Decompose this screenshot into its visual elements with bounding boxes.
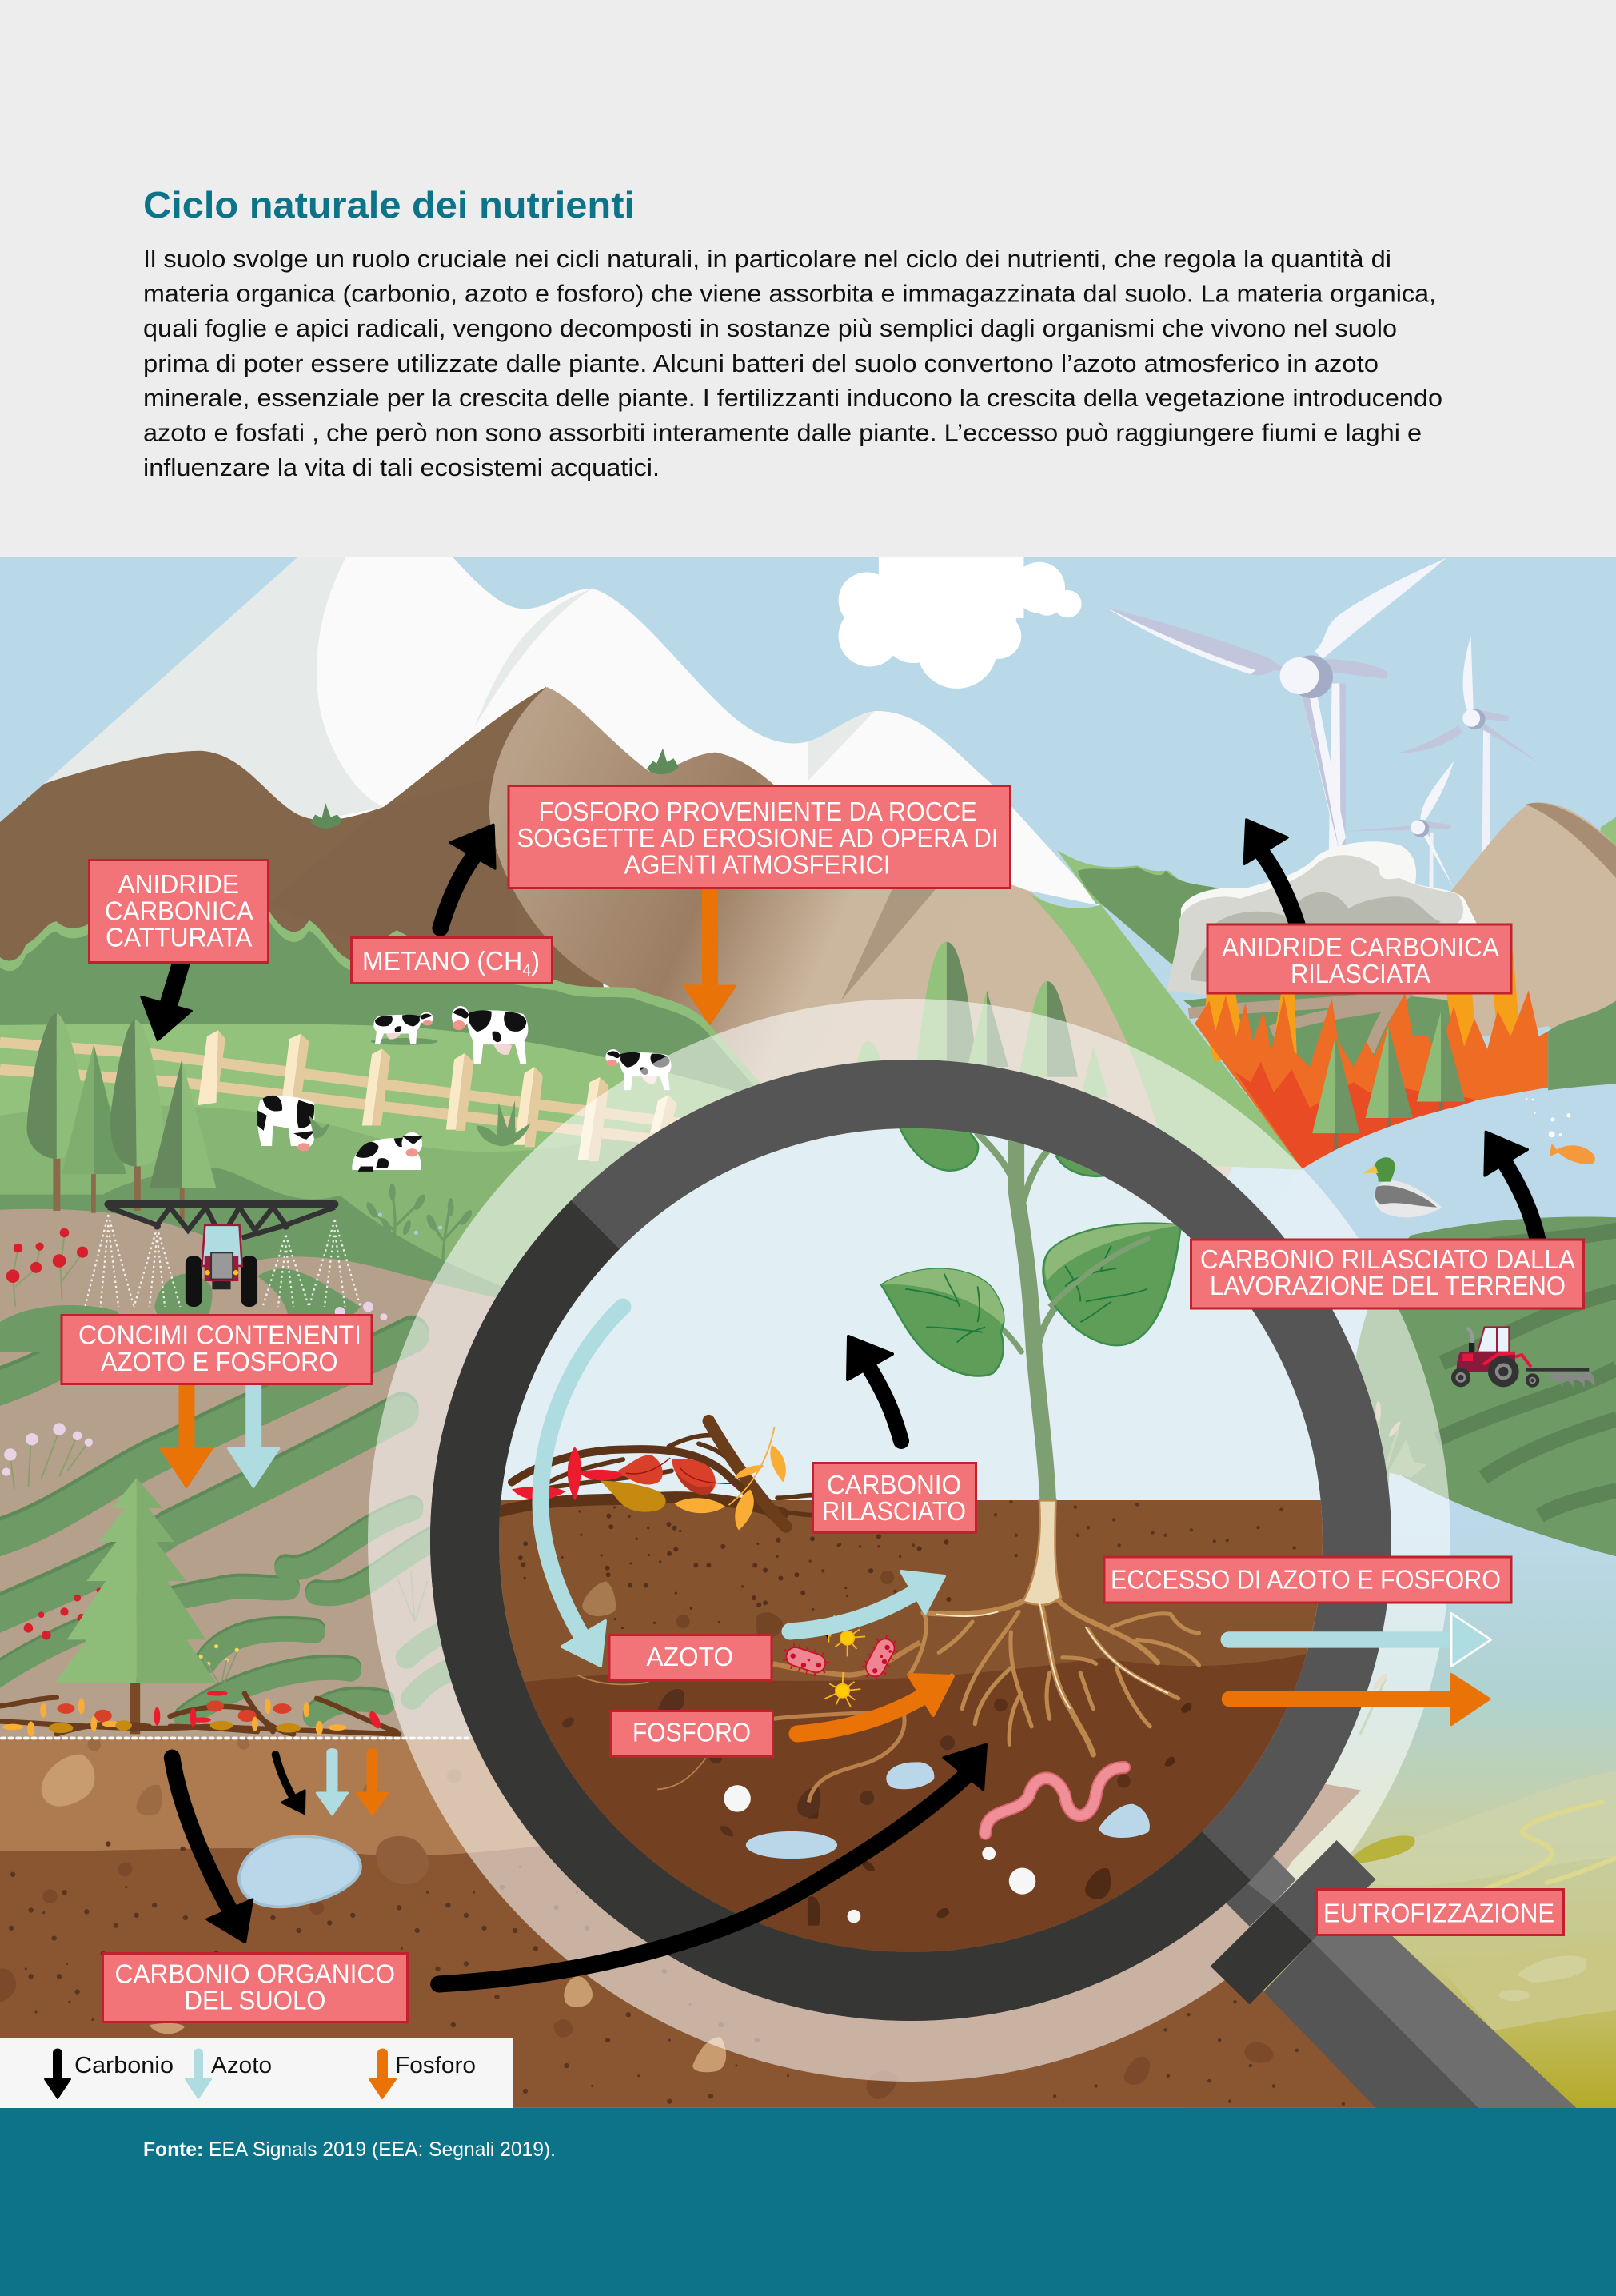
lens view: soil, plant, roots: [499, 1128, 1323, 1952]
duck: [1363, 1157, 1442, 1217]
cloud: [839, 552, 1082, 689]
magnifier collar: [1211, 1840, 1375, 2004]
long side roots: [577, 1643, 920, 1803]
soil specks upper right: [823, 1502, 1295, 1622]
label: excess nitrogen and phosphorus: [1104, 1557, 1511, 1603]
header band: [0, 0, 1616, 557]
magnifier ring: [465, 1094, 1357, 1987]
soil specks lower right: [1055, 2002, 1343, 2104]
label: carbon dioxide captured: [90, 861, 269, 963]
body text: minerale, essenziale per la crescita delle piante. I fertilizzanti inducono la crescita della vegetazione introducendo: [143, 384, 1442, 412]
label: phosphorus: [611, 1711, 772, 1756]
label: carbon released from litter: RILASCIATO: [822, 1497, 966, 1527]
right hill: [1323, 802, 1616, 1072]
body text: Il suolo svolge un ruolo cruciale nei cicli naturali, in particolare nel ciclo dei nutrienti, che regola la quantità di: [143, 245, 1391, 273]
label: nitrogen: AZOTO: [646, 1643, 733, 1672]
arrow: phosphorus from rock: [684, 888, 736, 1024]
label: soil organic carbon: [102, 1953, 408, 2022]
arrows: infiltration: [276, 1749, 388, 1815]
legend nitrogen: Azoto: [211, 2053, 272, 2078]
label: soil organic carbon: DEL SUOLO: [184, 1987, 326, 2015]
left leaf: [881, 1269, 1004, 1376]
fish: [1526, 1098, 1595, 1164]
fallen leaves: [512, 1427, 786, 1531]
cows: [257, 1006, 672, 1172]
title: Ciclo naturale dei nutrienti: [143, 184, 635, 226]
bacteria and microbes: [784, 1615, 897, 1707]
branches: [0, 1693, 399, 1734]
label: carbon released from litter: CARBONIO: [827, 1471, 961, 1500]
label: carbon dioxide released: ANIDRIDE CARBONICA: [1222, 933, 1500, 963]
label: phosphorus from rocks: [509, 785, 1011, 888]
arrow: carbon into soil: [172, 1758, 253, 1943]
label: carbon released from litter: [812, 1463, 976, 1532]
body text: influenzare la vita di tali ecosistemi acquatici.: [143, 453, 660, 481]
meadow: [0, 1024, 808, 1317]
yellow flowers: [199, 1644, 239, 1666]
label: carbon dioxide captured: CATTURATA: [106, 923, 253, 953]
shrub with blue berries: [365, 1184, 474, 1261]
legend phosphorus: Fosforo: [395, 2053, 476, 2078]
trees: [26, 1013, 217, 1221]
roots: [911, 1591, 1199, 1755]
red flowers: [24, 1587, 102, 1639]
source note: Fonte: EEA Signals 2019 (EEA: Segnali 2019).: [143, 2138, 556, 2161]
label: nitrogen: [609, 1635, 772, 1681]
big right leaf: [1043, 1224, 1181, 1345]
label: methane: METANO (CH: [362, 947, 530, 976]
label: methane: 4: [522, 961, 532, 980]
label: eutrophication: EUTROFIZZAZIONE: [1323, 1899, 1554, 1929]
arrows: excess nutrients: [1229, 1613, 1491, 1725]
label: carbon dioxide released: [1207, 924, 1511, 993]
label: methane: ): [531, 947, 540, 976]
right green strip: [1548, 1000, 1616, 1092]
label: carbon released by tillage: LAVORAZIONE DEL TERRENO: [1210, 1272, 1566, 1301]
translucent lens glass halo: [368, 999, 1450, 2082]
legend carbon: [45, 2049, 174, 2098]
pine tree: [55, 1478, 217, 1734]
wind turbines: [1105, 558, 1544, 888]
landscape background: [0, 552, 1616, 2113]
smoke: [1168, 841, 1477, 996]
arrow: carbon captured: [141, 964, 192, 1040]
legend phosphorus: [369, 2049, 476, 2098]
green slope: [1029, 893, 1305, 1170]
body text: materia organica (carbonio, azoto e fosforo) che viene assorbita e immagazzinata dal suolo. La materia organica,: [143, 280, 1436, 307]
lower green bank: [0, 1168, 515, 1368]
body text: prima di poter essere utilizzate dalle piante. Alcuni batteri del suolo convertono l’azoto atmosferico in azoto: [143, 349, 1379, 377]
arrows: fertiliser inputs: [161, 1385, 279, 1487]
tan field: [0, 1209, 772, 1740]
arrow: carbon released by tillage: [1485, 1132, 1538, 1240]
legend carbon: Carbonio: [74, 2053, 174, 2078]
legend: [0, 2038, 513, 2108]
meadow bushes: [309, 1100, 530, 1146]
puddle: [239, 1836, 361, 1907]
top leaves: [899, 1128, 1104, 1177]
lake and river: [1184, 1084, 1616, 2113]
label: phosphorus from rocks: FOSFORO PROVENIENTE DA ROCCE: [539, 797, 977, 827]
soil layers: [499, 1500, 1323, 1952]
lens arrows: [541, 1307, 953, 1734]
stem: [974, 1133, 1057, 1499]
label: methane: [352, 937, 552, 984]
plant and roots: [808, 1120, 1295, 1926]
mountain bush icons: [310, 749, 679, 829]
brown mountains: [0, 687, 1251, 1266]
poppies: [6, 1228, 88, 1307]
soil cross-section: [0, 1737, 1379, 2108]
body text: [143, 245, 1442, 481]
label: soil organic carbon: CARBONIO ORGANICO: [115, 1959, 395, 1990]
label: carbon dioxide captured: ANIDRIDE: [118, 870, 239, 900]
ring reeds: [1359, 1401, 1426, 1735]
label: carbon released by tillage: CARBONIO RILASCIATO DALLA: [1200, 1245, 1576, 1275]
arrow: nitrogen to roots: [790, 1571, 944, 1631]
arrow: nitrogen to soil: [541, 1307, 623, 1666]
flow arrows: [141, 820, 1538, 1984]
label: fertilisers: [62, 1315, 372, 1384]
arrow: phosphorus to roots: [797, 1675, 953, 1734]
body text: azoto e fosfati , che però non sono assorbiti interamente dalle piante. L’eccesso può raggiungere fiumi e laghi e: [143, 419, 1422, 446]
snowy mountain: [44, 552, 1102, 1011]
forest fire: [1183, 952, 1548, 1169]
label: carbon dioxide captured: CARBONICA: [105, 897, 254, 926]
far green hill: [1057, 850, 1271, 1036]
label: fertilisers: AZOTO E FOSFORO: [101, 1348, 337, 1377]
arrow: carbon released by fire: [1244, 820, 1298, 927]
pond life: [1363, 1098, 1595, 1217]
branch litter, bacteria (detail coordinates): [501, 1421, 954, 1859]
small tractor with plough: [1451, 1327, 1594, 1388]
magnifier handle: [1263, 1900, 1580, 2111]
soil specks left: [11, 1844, 772, 2102]
label: carbon dioxide released: RILASCIATA: [1291, 960, 1431, 989]
specks: [521, 1516, 948, 1605]
arrow: soil carbon to roots: [439, 1744, 986, 1984]
green ridge: [0, 908, 876, 1225]
body text: quali foglie e apici radicali, vengono decomposti in sostanze più semplici dagli organismi che vivono nel suolo: [143, 314, 1397, 342]
ground line: [2, 1736, 469, 1741]
forest floor pine and litter: [0, 1478, 469, 1739]
branches: [501, 1421, 815, 1528]
worm: [985, 1767, 1124, 1834]
label: fertilisers: CONCIMI CONTENENTI: [78, 1321, 361, 1350]
label: eutrophication: [1316, 1889, 1564, 1935]
label: phosphorus from rocks: SOGGETTE AD EROSIONE AD OPERA DI: [517, 824, 998, 853]
right green hill with field strips: [1349, 1217, 1616, 1607]
arrow: methane: [441, 825, 495, 928]
label: excess nitrogen and phosphorus: ECCESSO DI AZOTO E FOSFORO: [1111, 1566, 1501, 1595]
pale flower bush in ring: [397, 1571, 428, 1622]
footer band: [0, 2108, 1616, 2296]
arrow: carbon released from litter: [848, 1336, 901, 1441]
fence: [0, 1030, 680, 1161]
pink flowers: [2, 1302, 387, 1489]
label: phosphorus: FOSFORO: [632, 1718, 751, 1748]
field sprayer tractor: [85, 1204, 361, 1307]
legend nitrogen: [186, 2049, 272, 2098]
background trees in lens ring: [854, 942, 1109, 1097]
water pockets and stones: [808, 1699, 1191, 1926]
label: carbon released by tillage: [1191, 1240, 1583, 1308]
label: phosphorus from rocks: AGENTI ATMOSFERICI: [624, 851, 891, 880]
